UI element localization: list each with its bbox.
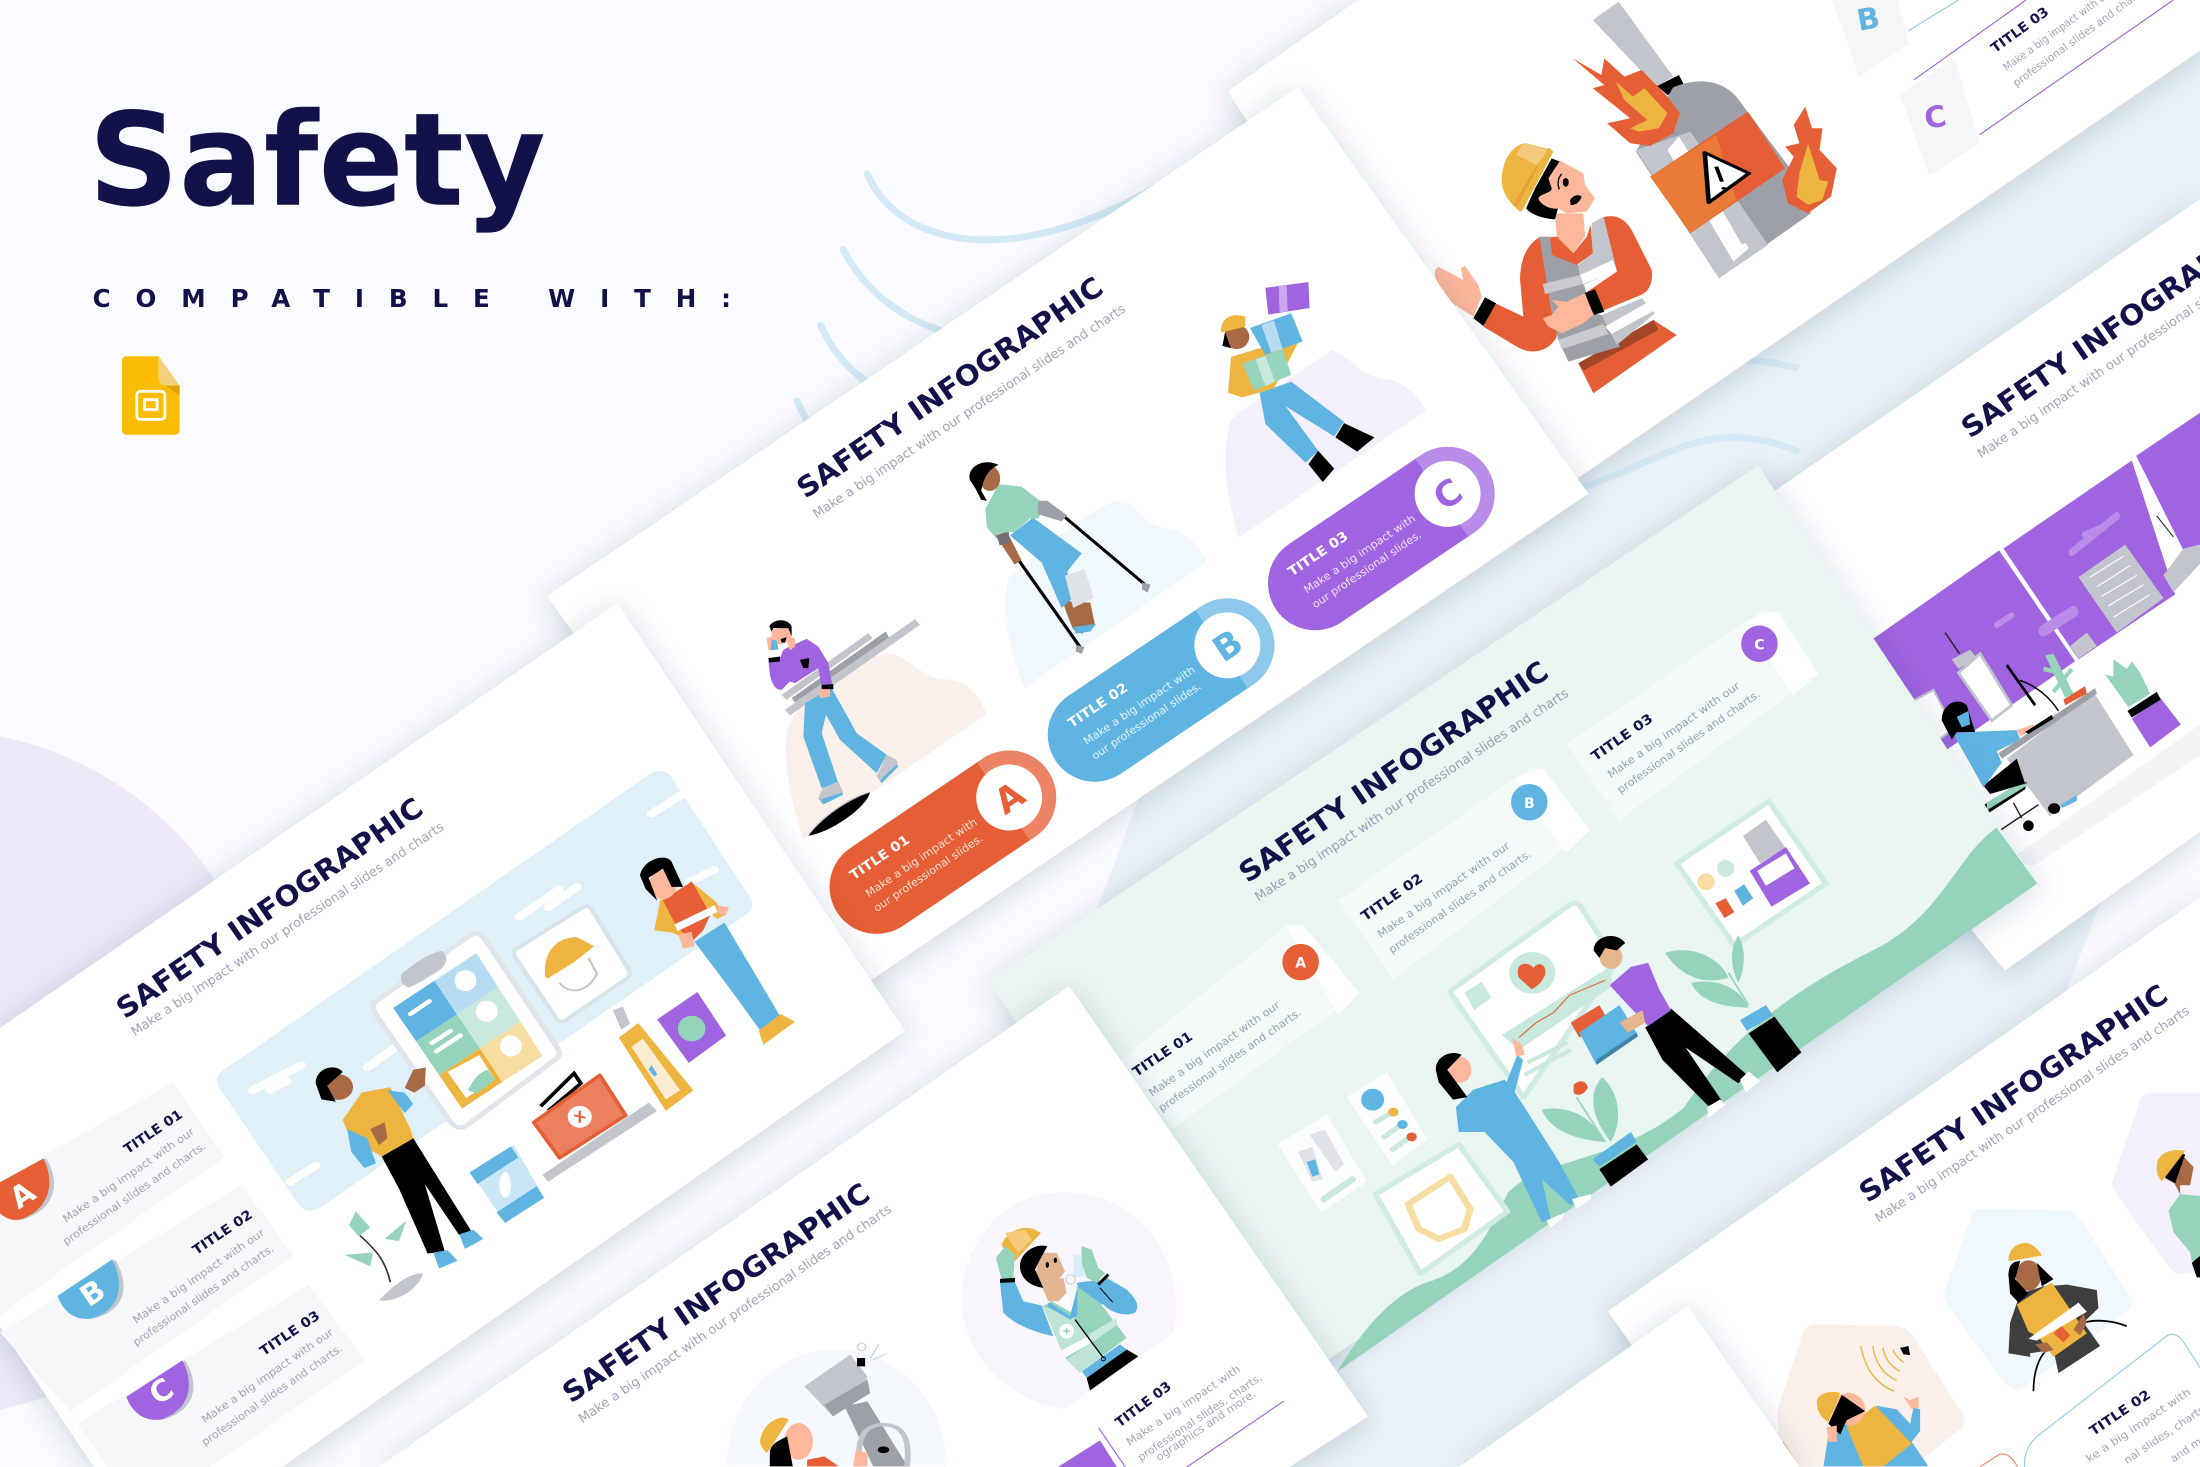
decorative blue arcs — [797, 174, 1799, 491]
slide title: SAFETY INFOGRAPHIC — [1853, 978, 2174, 1209]
text block: title 03: TITLE 03 — [1989, 5, 2052, 57]
card: title 02 — [0, 1185, 293, 1411]
card: title 03 — [77, 1285, 365, 1467]
pill: title 01: TITLE 01 — [847, 833, 913, 884]
panel: bottom right slide with hexagons — [1608, 898, 2200, 1467]
pill: title 02: B — [1205, 622, 1251, 671]
pill: title 01: our professional slides. — [871, 832, 985, 915]
card: title 03: professional slides and charts. — [199, 1342, 345, 1448]
slide title: SAFETY INFOGRAPHIC — [110, 791, 429, 1025]
illustration: hexagon alarm worker — [1777, 1324, 1965, 1466]
pill: title 03: our professional slides. — [1310, 528, 1424, 611]
card: title 01 — [1117, 926, 1360, 1128]
text block: title 03: Make a big impact with — [1124, 1362, 1243, 1448]
pill: title 02: TITLE 02 — [1066, 681, 1131, 732]
pill: title 03: TITLE 03 — [1286, 529, 1351, 580]
compatible with label: COMPATIBLE WITH: — [93, 284, 731, 313]
illustration: woman on crutches — [969, 462, 1206, 688]
card: title 01: A — [1295, 956, 1306, 972]
panel: crutches slide with pills — [547, 87, 1588, 1003]
card: title 01: Make a big impact with our — [60, 1125, 197, 1225]
slide subtitle: Make a big impact with our professional slides and charts — [1252, 686, 1572, 905]
illustration: helmet card — [514, 906, 629, 1022]
card: title 01: A — [4, 1174, 42, 1216]
icon: google slides — [122, 356, 180, 435]
card: title 02: B — [74, 1273, 111, 1314]
card: title 03: C — [143, 1371, 180, 1412]
card: title 03: TITLE 03 — [1589, 712, 1656, 765]
slide title: SAFETY INFOGRAPHIC — [791, 270, 1109, 505]
pill: title 03: Make a big impact with — [1301, 512, 1418, 596]
card: title 03: C — [1754, 637, 1765, 653]
card: title 03: Make a big impact with our — [199, 1325, 336, 1426]
card: title 01 — [0, 1083, 224, 1316]
main title: Safety — [88, 86, 546, 236]
pill: title 02 — [1029, 580, 1293, 800]
panel: office slide with purple windows — [1671, 199, 2200, 971]
illustration: man and plant — [316, 1067, 483, 1301]
card: title 03 — [1567, 611, 1818, 820]
pill: title 03 — [1250, 429, 1513, 648]
tile: letter B — [1832, 0, 1910, 77]
slide subtitle: Make a big impact with our professional slides and charts — [129, 820, 447, 1040]
illustration: woman in blue overalls — [1436, 1037, 1591, 1227]
illustration: worker at valve — [727, 1343, 947, 1466]
illustration: medical cards — [1278, 801, 1826, 1274]
illustration: desk and seated woman — [1942, 654, 2200, 866]
text block: title 02: ke a big impact with — [2084, 1385, 2193, 1465]
slide title: SAFETY INFOGRAPHIC — [1233, 655, 1555, 889]
tile: letter C: C — [1922, 99, 1949, 136]
text card outline: title 01 — [1980, 1454, 2018, 1467]
card: title 03: TITLE 03 — [258, 1309, 323, 1360]
card: title 02: professional slides and charts. — [130, 1242, 276, 1349]
pill: title 01: Make a big impact with — [863, 815, 979, 900]
pill: title 02: our professional slides. — [1089, 680, 1204, 762]
panel: bottom slide with mask worker — [379, 986, 1368, 1467]
background purple circle — [0, 736, 275, 1409]
illustration: man walking to open manhole — [767, 619, 987, 839]
illustration: first aid items — [470, 992, 726, 1223]
illustration: clipboard checklist — [373, 933, 559, 1128]
panel: left slide with safety checklist — [0, 603, 905, 1467]
illustration: worker carrying boxes — [1221, 282, 1426, 538]
panel: bottom partial slide — [1459, 1306, 1800, 1467]
text card outline: title 02 — [2025, 1334, 2200, 1467]
card: title 01: TITLE 01 — [122, 1107, 186, 1158]
background pale blue band — [982, 0, 2200, 1467]
illustration: purple windows with skyline — [1868, 413, 2200, 759]
card: title 02: professional slides and charts. — [1386, 847, 1534, 956]
card: title 02: Make a big impact with our — [1375, 839, 1513, 941]
card: title 02 — [1339, 769, 1590, 979]
illustration: blue sky panel with clouds — [217, 771, 752, 1211]
purple tab — [1058, 1440, 1117, 1467]
illustration: worker in hard hat — [1435, 143, 1677, 393]
text card outline: title 03 — [1099, 1401, 1284, 1467]
panel: green medical slide — [989, 466, 2037, 1400]
text block: title 03: professional slides, charts, — [1135, 1371, 1265, 1464]
pill: title 02: Make a big impact with — [1081, 663, 1198, 748]
text block: title 02: TITLE 02 — [2087, 1388, 2154, 1439]
card: title 03: professional slides and charts. — [1615, 687, 1762, 796]
card: title 02: TITLE 02 — [1359, 871, 1426, 925]
illustration: woman in safety vest — [640, 858, 795, 1045]
illustration: man with folder — [1571, 936, 1760, 1118]
card: title 03: Make a big impact with our — [1605, 679, 1743, 781]
card: title 02: Make a big impact with our — [130, 1226, 267, 1326]
card: title 02: B — [1524, 796, 1535, 812]
orange tab — [1747, 1442, 1800, 1467]
pill: title 03: C — [1426, 471, 1470, 519]
green hill — [1337, 827, 2037, 1372]
slide subtitle: Make a big impact with our professional slides and charts — [1873, 1004, 2193, 1226]
illustration: gas cylinder with flames — [1573, 2, 1837, 278]
text block: title 03: TITLE 03 — [1113, 1379, 1175, 1431]
tile: letter C — [1900, 59, 1980, 175]
slide subtitle: Make a big impact with our professional slides and charts — [810, 302, 1129, 522]
pill: title 01: A — [987, 774, 1033, 823]
card: title 01: professional slides and charts. — [60, 1140, 208, 1248]
slide title: SAFETY INFOGRAPHIC — [556, 1176, 876, 1410]
card: title 01: Make a big impact with our — [1146, 998, 1283, 1099]
text card outline: title 03 — [1908, 0, 2173, 135]
card: title 01: TITLE 01 — [1130, 1030, 1196, 1080]
illustration: hexagon first aid worker — [2112, 1093, 2200, 1277]
tile: letter B: B — [1854, 0, 1882, 38]
text block: title 03: ographics and more. — [1153, 1387, 1258, 1464]
card: title 02: TITLE 02 — [190, 1208, 256, 1259]
panel: fire hazard slide — [1228, 0, 2200, 526]
slide subtitle: Make a big impact with our professional slides and charts — [576, 1202, 895, 1427]
card: title 01: professional slides and charts. — [1156, 1006, 1304, 1115]
pill: title 01 — [811, 732, 1074, 952]
illustration: plants and pots — [1542, 936, 1801, 1187]
illustration: worker holding mask — [961, 1192, 1176, 1409]
illustration: hexagon electrician — [1944, 1209, 2132, 1391]
